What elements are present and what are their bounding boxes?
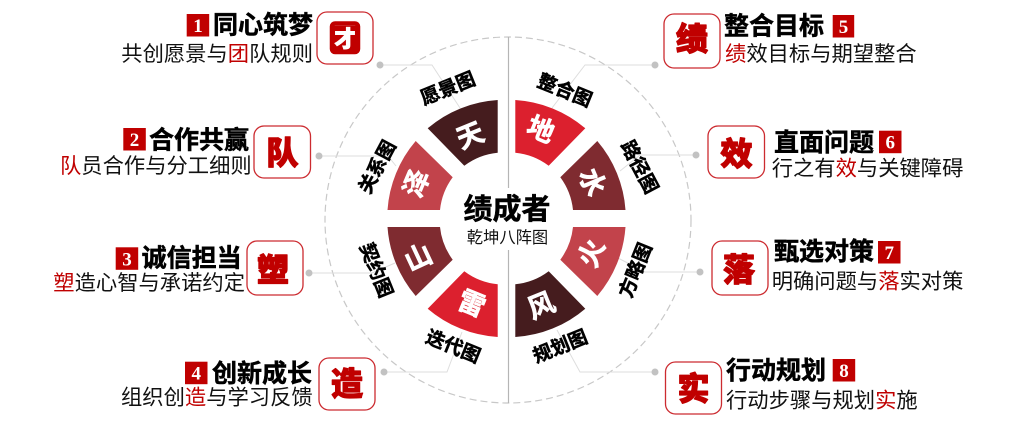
sector: 地 — [515, 100, 585, 166]
sector: 风: 风 — [523, 287, 560, 325]
sector: 天: 天 — [452, 117, 489, 155]
connector: 8 — [557, 330, 658, 376]
connector: 3 — [306, 263, 395, 276]
item 2: 合作共赢: 合作共赢 — [149, 126, 249, 154]
center title: 乾坤八阵图 — [467, 229, 548, 247]
item 5: 整合目标: 整合目标 — [724, 12, 824, 40]
item 7: 甄选对策: 落 — [723, 252, 755, 288]
item 5: 整合目标: 绩效目标与期望整合 — [725, 42, 917, 66]
sector: 地: 地 — [522, 111, 559, 149]
label: 契约图: 契约图 — [355, 240, 397, 301]
label: 方略图: 方略图 — [614, 239, 657, 301]
connector: 2 — [316, 152, 396, 166]
item 2: 合作共赢: 队 — [266, 135, 299, 171]
sector: 水: 水 — [573, 164, 611, 201]
item 8: 行动规划: 8 — [839, 361, 849, 382]
item 4: 创新成长: 造 — [331, 366, 363, 402]
connector: 1 — [376, 62, 460, 108]
item 2: 合作共赢: 队员合作与分工细则 — [60, 154, 252, 178]
item 2: 合作共赢: 2 — [130, 130, 139, 151]
item 1: 同心筑梦: 1 — [193, 16, 203, 37]
sector: 水 — [560, 141, 626, 210]
label: 迭代图: 迭代图 — [422, 326, 483, 368]
item 4: 创新成长 — [121, 358, 375, 410]
connector: 7 — [618, 258, 704, 276]
item 4: 创新成长: 创新成长 — [212, 360, 312, 388]
item 8: 行动规划 — [666, 357, 918, 414]
sector: 火: 火 — [573, 235, 611, 272]
sector: 泽 — [388, 141, 453, 210]
item 1: 同心筑梦 — [121, 12, 373, 66]
label: 规划图: 规划图 — [530, 326, 591, 368]
item 7: 甄选对策: 甄选对策 — [774, 238, 874, 266]
sector: 山: 山 — [400, 239, 437, 277]
item 7: 甄选对策: 7 — [885, 243, 895, 264]
label: 整合图: 整合图 — [534, 70, 595, 112]
item 6: 直面问题: 6 — [886, 133, 895, 154]
item 6: 直面问题 — [708, 126, 963, 181]
connector: 4 — [380, 332, 462, 376]
center title — [463, 193, 551, 247]
item 3: 诚信担当 — [53, 241, 303, 295]
item 3: 诚信担当: 3 — [122, 249, 132, 270]
item 4: 创新成长: 4 — [192, 364, 202, 385]
item 8: 行动规划: 实 — [677, 371, 710, 407]
connector: 6 — [620, 152, 700, 171]
sector: 火 — [560, 227, 626, 296]
item 6: 直面问题: 直面问题 — [774, 129, 874, 157]
item 5: 整合目标: 5 — [839, 17, 848, 38]
label: 路径图: 路径图 — [616, 137, 662, 198]
sector: 雷: 雷 — [453, 285, 490, 323]
item 7: 甄选对策: 明确问题与落实对策 — [772, 270, 963, 294]
item 1: 同心筑梦: 共创愿景与团队规则 — [121, 42, 313, 66]
center title: 绩成者 — [463, 193, 551, 226]
item 7: 甄选对策 — [712, 238, 963, 295]
item 8: 行动规划: 行动规划 — [726, 357, 826, 385]
sector: 山 — [388, 227, 453, 296]
item 5: 整合目标: 绩 — [676, 21, 708, 57]
item 5: 整合目标 — [664, 12, 917, 68]
sector: 泽: 泽 — [398, 165, 436, 202]
item 3: 诚信担当: 塑 — [257, 252, 289, 288]
connector: 5 — [552, 62, 658, 108]
item 3: 诚信担当: 诚信担当 — [142, 244, 242, 272]
item 3: 诚信担当: 塑造心智与承诺约定 — [53, 271, 245, 295]
sector: 雷 — [428, 271, 498, 337]
label: 愿景图: 愿景图 — [418, 68, 479, 110]
item 8: 行动规划: 行动步骤与规划实施 — [726, 388, 918, 412]
item 1: 同心筑梦: 同心筑梦 — [213, 12, 313, 40]
item 2: 合作共赢 — [60, 126, 310, 178]
item 6: 直面问题: 效 — [720, 136, 753, 172]
item 6: 直面问题: 行之有效与关键障碍 — [772, 157, 963, 181]
sector: 风 — [515, 271, 585, 337]
item 1: 同心筑梦: 团 — [326, 20, 364, 62]
label: 关系图: 关系图 — [354, 137, 401, 198]
item 4: 创新成长: 组织创造与学习反馈 — [121, 386, 313, 410]
sector: 天 — [428, 100, 498, 166]
